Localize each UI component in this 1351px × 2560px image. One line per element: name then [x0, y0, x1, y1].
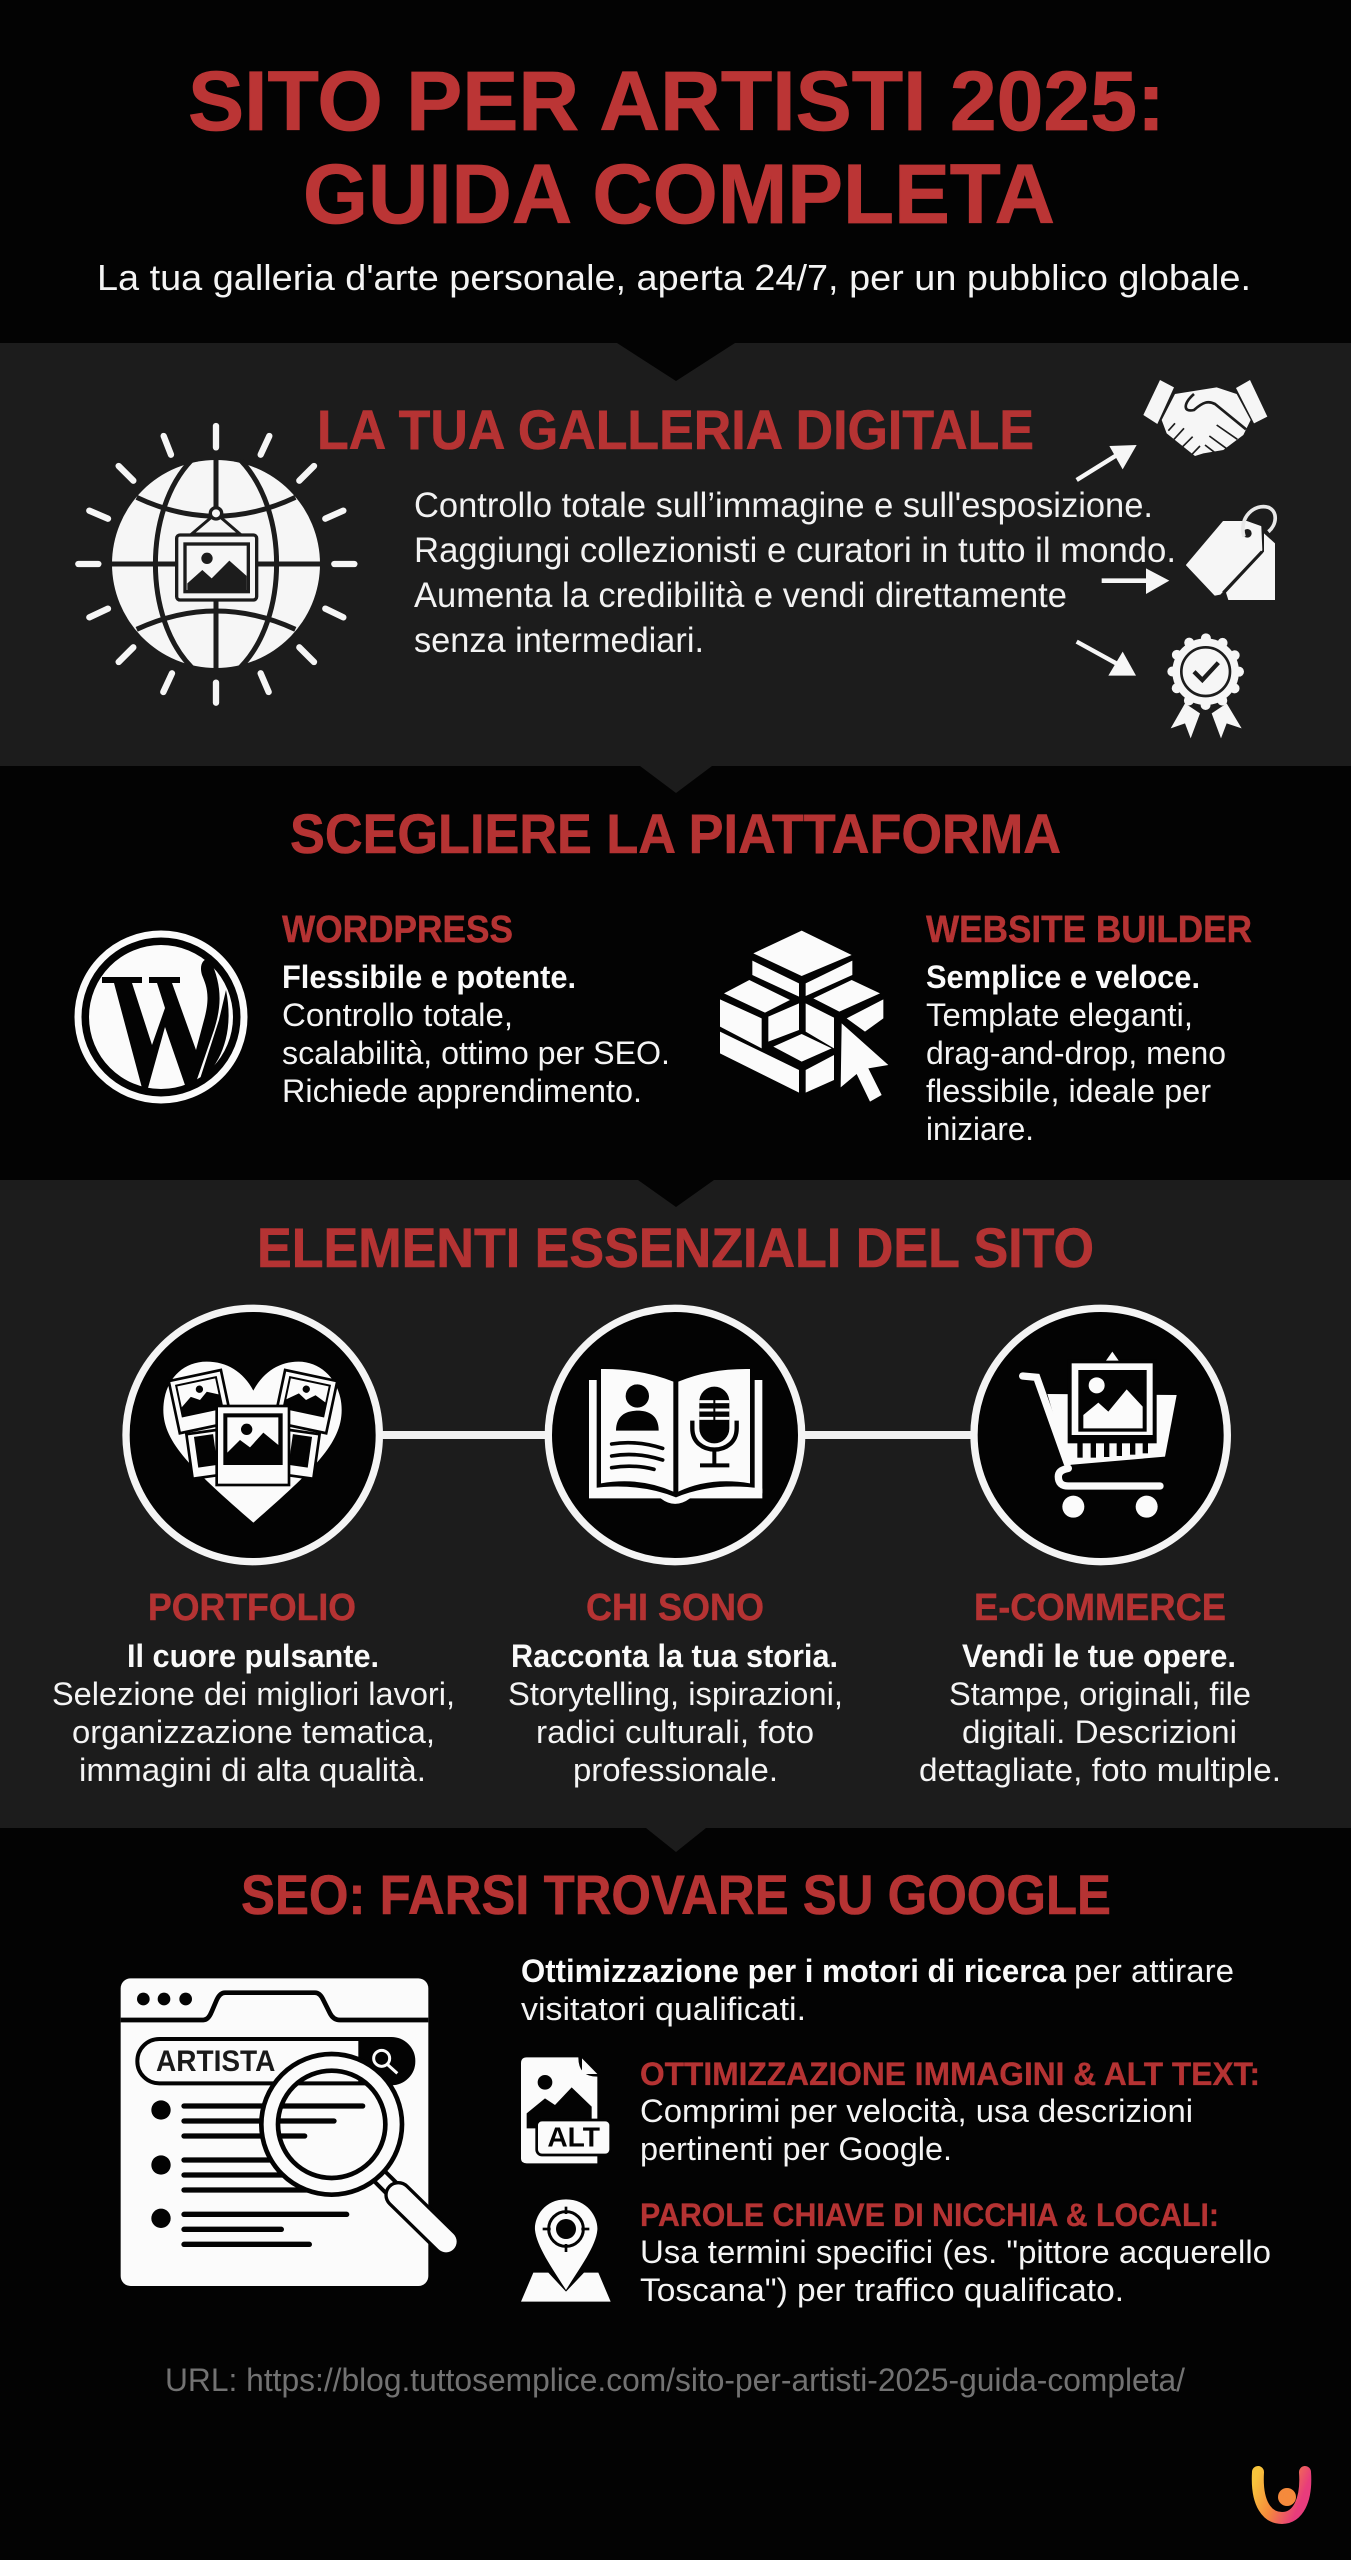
- text block: wordpress: [282, 909, 670, 1109]
- icon: map pin with target: [521, 2199, 611, 2302]
- text block: image optimisation: [640, 2056, 1260, 2167]
- column: e-commerce: dettagliate, foto multiple.: [919, 1752, 1281, 1788]
- title: GUIDA COMPLETA: [303, 147, 1055, 241]
- text block: image optimisation: pertinenti per Google.: [640, 2131, 952, 2167]
- text block: keywords: Usa termini specifici (es. "pittore acquerello: [640, 2234, 1271, 2270]
- text block: seo intro: per attirare: [1074, 1953, 1234, 1989]
- column: e-commerce: [919, 1587, 1281, 1788]
- arrow: to badge: [1077, 642, 1136, 676]
- column: portfolio: PORTFOLIO: [148, 1587, 356, 1629]
- text block: image optimisation: OTTIMIZZAZIONE IMMAGINI & ALT TEXT:: [640, 2056, 1260, 2092]
- icon: globe with framed picture: [78, 426, 354, 703]
- column: portfolio: organizzazione tematica,: [72, 1714, 435, 1750]
- body text: benefits: [414, 486, 1176, 660]
- title: [188, 54, 1165, 241]
- column: chi sono: [508, 1587, 843, 1788]
- text block: website builder: Semplice e veloce.: [926, 959, 1200, 995]
- panel: la tua galleria digitale: [0, 343, 1351, 766]
- icon: browser search with magnifier: ARTISTA: [156, 2045, 275, 2078]
- icon: price tags: [1187, 507, 1275, 600]
- column: chi sono: CHI SONO: [586, 1587, 764, 1629]
- body text: benefits: Controllo totale sull’immagine e sull'esposizione.: [414, 486, 1153, 525]
- column: chi sono: Racconta la tua storia.: [511, 1638, 838, 1674]
- text block: website builder: flessibile, ideale per: [926, 1073, 1211, 1109]
- icon: building blocks with cursor: [720, 931, 888, 1102]
- panel: elementi essenziali del sito: [0, 1180, 1351, 1828]
- column: portfolio: Il cuore pulsante.: [127, 1638, 379, 1674]
- icon: award badge: [1171, 638, 1242, 738]
- heading: la tua galleria digitale: LA TUA GALLERIA DIGITALE: [317, 398, 1034, 461]
- text block: website builder: iniziare.: [926, 1111, 1034, 1147]
- column: e-commerce: E-COMMERCE: [974, 1587, 1226, 1629]
- column: portfolio: [52, 1587, 455, 1788]
- text block: wordpress: Flessibile e potente.: [282, 959, 576, 995]
- column: chi sono: Storytelling, ispirazioni,: [508, 1676, 843, 1712]
- icon: shopping cart with artwork: [974, 1308, 1227, 1562]
- text block: wordpress: Richiede apprendimento.: [282, 1073, 642, 1109]
- icon: browser search with magnifier: [121, 1978, 446, 2286]
- text block: website builder: Template eleganti,: [926, 997, 1193, 1033]
- subtitle: La tua galleria d'arte personale, aperta 24/7, per un pubblico globale.: [97, 257, 1251, 298]
- connector line: [380, 1431, 980, 1439]
- text block: wordpress: scalabilità, ottimo per SEO.: [282, 1035, 670, 1071]
- text block: keywords: Toscana") per traffico qualificato.: [640, 2272, 1124, 2308]
- title: SITO PER ARTISTI 2025:: [188, 54, 1165, 148]
- text block: wordpress: WORDPRESS: [282, 909, 513, 951]
- column: chi sono: professionale.: [573, 1752, 778, 1788]
- arrow: to handshake: [1077, 445, 1137, 480]
- arrow: to price tag: [1102, 568, 1169, 594]
- column: e-commerce: Stampe, originali, file: [949, 1676, 1251, 1712]
- footer url: URL: https://blog.tuttosemplice.com/sito-per-artisti-2025-guida-completa/: [165, 2362, 1185, 2398]
- icon: image file with alt label: ALT: [547, 2122, 600, 2153]
- column: e-commerce: Vendi le tue opere.: [962, 1638, 1236, 1674]
- text block: website builder: WEBSITE BUILDER: [926, 909, 1252, 951]
- column: chi sono: radici culturali, foto: [536, 1714, 814, 1750]
- text block: keywords: PAROLE CHIAVE DI NICCHIA & LOCALI:: [640, 2197, 1219, 2233]
- header: [97, 54, 1251, 298]
- icon: portfolio heart: [126, 1308, 379, 1562]
- column: e-commerce: digitali. Descrizioni: [962, 1714, 1237, 1750]
- icon: handshake: [1143, 380, 1267, 456]
- logo: [1258, 2472, 1305, 2518]
- column: portfolio: immagini di alta qualità.: [79, 1752, 426, 1788]
- text block: website builder: drag-and-drop, meno: [926, 1035, 1226, 1071]
- body text: benefits: senza intermediari.: [414, 621, 704, 660]
- text block: keywords: [640, 2197, 1271, 2308]
- text block: image optimisation: Comprimi per velocità, usa descrizioni: [640, 2093, 1193, 2129]
- text block: seo intro: [521, 1953, 1234, 2027]
- heading: seo: SEO: FARSI TROVARE SU GOOGLE: [241, 1863, 1111, 1926]
- icon: wordpress logo: [78, 934, 244, 1100]
- icon: image file with alt label: [521, 2057, 611, 2163]
- panel: seo: [121, 1828, 1271, 2308]
- heading: elementi essenziali: ELEMENTI ESSENZIALI DEL SITO: [257, 1216, 1094, 1279]
- body text: benefits: Aumenta la credibilità e vendi direttamente: [414, 576, 1067, 615]
- body text: benefits: Raggiungi collezionisti e curatori in tutto il mondo.: [414, 531, 1176, 570]
- panel: scegliere la piattaforma: [78, 766, 1252, 1147]
- text block: seo intro: Ottimizzazione per i motori di ricerca: [521, 1953, 1066, 1989]
- text block: wordpress: Controllo totale,: [282, 997, 513, 1033]
- column: portfolio: Selezione dei migliori lavori,: [52, 1676, 455, 1712]
- icons and arrows: benefits: [1077, 380, 1275, 738]
- text block: seo intro: visitatori qualificati.: [521, 1991, 806, 2027]
- text block: website builder: [926, 909, 1252, 1147]
- heading: scegliere la piattaforma: SCEGLIERE LA PIATTAFORMA: [290, 802, 1061, 865]
- icon: open book with person and microphone: [548, 1308, 802, 1562]
